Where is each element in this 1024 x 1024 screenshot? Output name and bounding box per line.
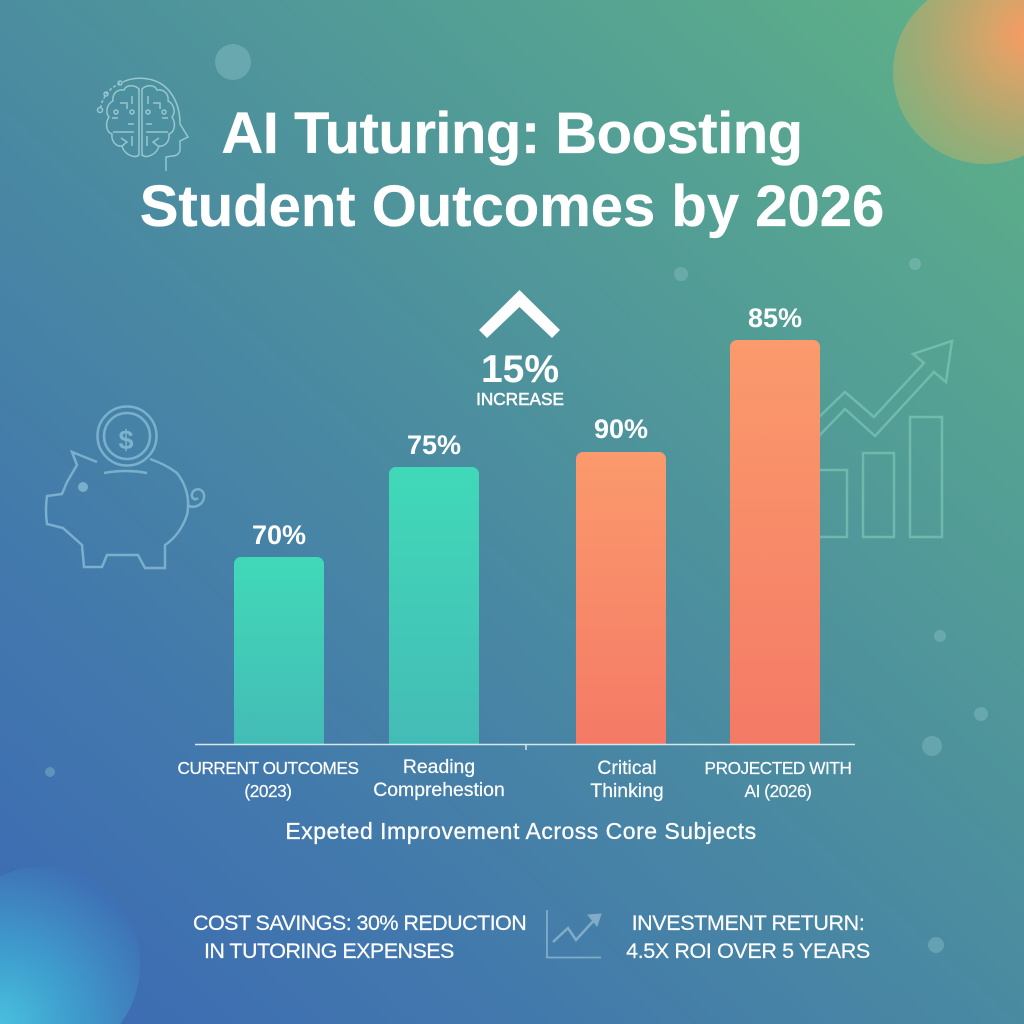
callout: 15% increase: 15% [481, 348, 559, 391]
value label 90%: 90% [594, 414, 648, 444]
callout: 15% increase: INCREASE [476, 389, 564, 409]
callout: 15% increase [476, 348, 564, 409]
value label 70%: 70% [252, 520, 306, 550]
cost savings text: COST SAVINGS: 30% REDUCTION [193, 911, 526, 935]
cost savings text: IN TUTORING EXPENSES [204, 939, 454, 963]
axis label: projected with AI: AI (2026) [745, 781, 811, 801]
bar: reading comprehension [389, 467, 479, 744]
axis label: current outcomes: CURRENT OUTCOMES [177, 758, 359, 778]
title: Student Outcomes by 2026 [140, 174, 884, 239]
investment return text: 4.5X ROI OVER 5 YEARS [626, 939, 870, 963]
icon: small line chart [546, 910, 602, 958]
axis label: current outcomes: (2023) [244, 781, 292, 801]
axis label: projected with AI [705, 758, 851, 801]
arrow: increase chevron [479, 290, 560, 338]
axis label: critical thinking: Critical [597, 757, 657, 779]
bar: critical thinking [576, 452, 666, 744]
value label 75%: 75% [407, 430, 461, 460]
chart caption: Expeted Improvement Across Core Subjects [285, 818, 757, 844]
investment return text [626, 911, 870, 963]
axis label: reading comprehension [373, 756, 505, 801]
investment return text: INVESTMENT RETURN: [632, 911, 864, 935]
axis label: critical thinking: Thinking [590, 780, 664, 802]
axis label: projected with AI: PROJECTED WITH [705, 758, 851, 778]
bar: current outcomes [234, 557, 324, 744]
cost savings text [193, 911, 526, 963]
axis label: critical thinking [590, 757, 664, 802]
bar: projected with AI [730, 340, 820, 744]
value label 85%: 85% [748, 303, 802, 333]
title [140, 101, 884, 239]
axis label: reading comprehension: Comprehestion [373, 779, 505, 801]
icon: growth chart [820, 339, 954, 538]
axis label: reading comprehension: Reading [403, 756, 475, 778]
icon: piggy bank: $ [118, 425, 134, 455]
axis label: current outcomes [177, 758, 359, 801]
icon: piggy bank [44, 405, 206, 570]
chart axis [195, 744, 855, 750]
icon: brain in head [96, 78, 189, 171]
title: AI Tuturing: Boosting [221, 101, 803, 166]
